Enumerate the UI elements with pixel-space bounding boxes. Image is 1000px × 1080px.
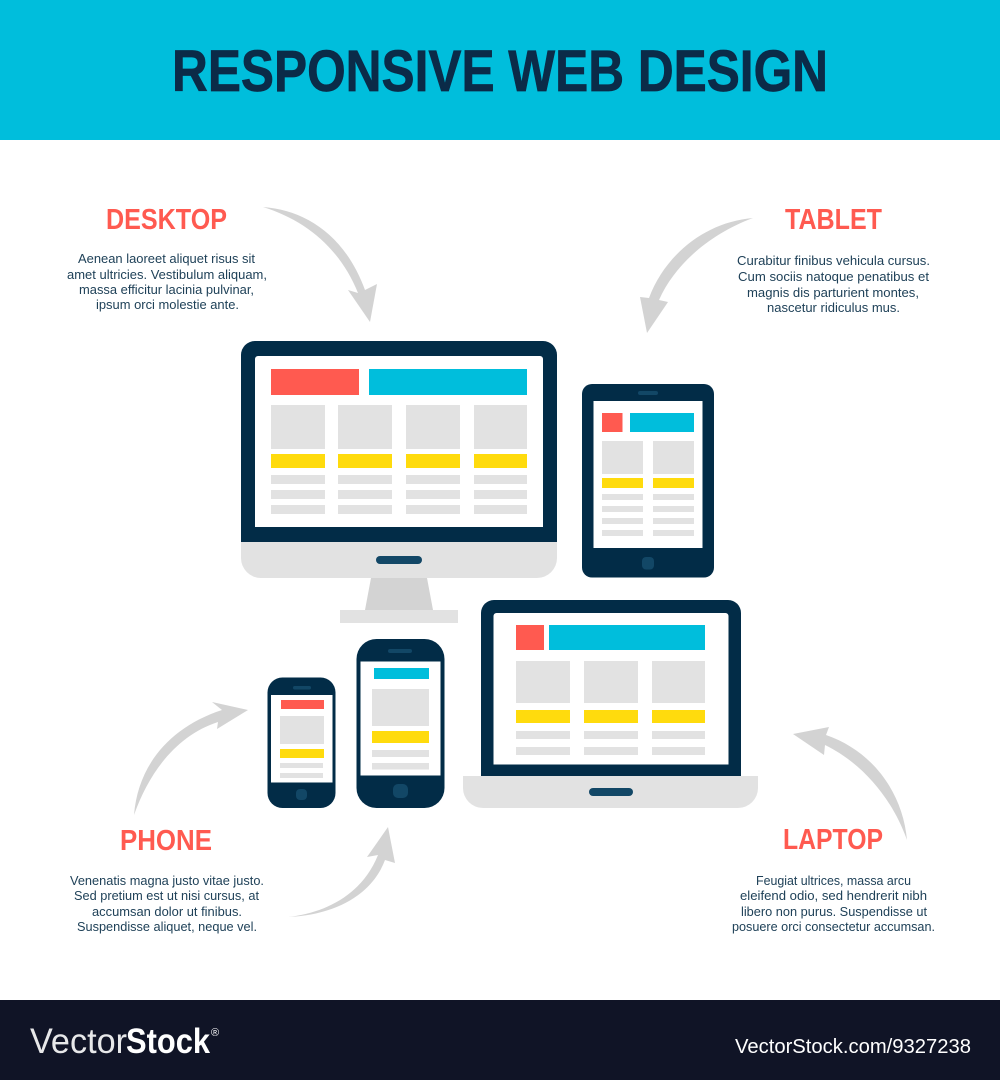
arrow: phone lower <box>288 827 395 917</box>
text block: tablet: Cum sociis natoque penatibus et <box>738 270 930 284</box>
text block: laptop: libero non purus. Suspendisse ut <box>741 905 928 919</box>
tablet screen <box>594 401 702 548</box>
laptop lid <box>481 600 741 776</box>
text block: desktop: massa efficitur lacinia pulvinar, <box>79 283 254 297</box>
panel: desktop description <box>67 204 267 312</box>
small phone screen <box>271 695 332 782</box>
heading: phone: PHONE <box>120 825 212 857</box>
monitor base <box>340 610 458 623</box>
arrow: laptop <box>793 727 907 840</box>
device: large phone <box>356 639 444 808</box>
monitor chin <box>241 542 557 578</box>
device: small phone <box>268 678 336 808</box>
text block: phone: Suspendisse aliquet, neque vel. <box>77 920 257 934</box>
text block: laptop: eleifend odio, sed hendrerit nibh <box>740 889 927 903</box>
text block: laptop <box>732 874 935 934</box>
text block: phone: Venenatis magna justo vitae justo. <box>70 874 264 888</box>
footer logo: ® <box>211 1027 219 1039</box>
monitor frame <box>241 341 557 542</box>
text block: tablet: magnis dis parturient montes, <box>747 286 919 300</box>
arrow: tablet <box>640 218 753 333</box>
footer logo: Vector <box>30 1022 127 1061</box>
heading: tablet: TABLET <box>785 204 882 236</box>
device: laptop <box>463 600 758 808</box>
text block: laptop: Feugiat ultrices, massa arcu <box>756 874 911 888</box>
laptop screen <box>494 613 728 764</box>
monitor stand <box>365 578 433 610</box>
text block: phone: Sed pretium est ut nisi cursus, at <box>74 889 260 903</box>
arrow: phone upper <box>134 702 248 815</box>
text block: tablet: nascetur ridiculus mus. <box>767 301 900 315</box>
device: tablet <box>582 384 714 578</box>
text block: tablet <box>737 254 930 315</box>
text block: desktop: ipsum orci molestie ante. <box>96 298 239 312</box>
text block: desktop: Aenean laoreet aliquet risus sit <box>78 252 256 266</box>
panel: laptop description <box>732 824 935 934</box>
heading: laptop: LAPTOP <box>783 824 883 856</box>
device: desktop monitor <box>241 341 557 623</box>
footer logo <box>30 1022 219 1061</box>
text block: tablet: Curabitur finibus vehicula cursus. <box>737 254 930 268</box>
heading: desktop: DESKTOP <box>106 204 227 236</box>
footer bar <box>0 1000 1000 1080</box>
large phone screen <box>360 662 440 776</box>
text block: desktop <box>67 252 267 312</box>
arrow: desktop <box>263 207 377 322</box>
monitor screen <box>255 356 543 527</box>
text block: phone: accumsan dolor ut finibus. <box>92 905 242 919</box>
panel: tablet description <box>737 204 930 315</box>
title: RESPONSIVE WEB DESIGN <box>172 39 828 104</box>
footer logo: Stock <box>126 1022 210 1061</box>
text block: phone <box>70 874 264 934</box>
text block: desktop: amet ultricies. Vestibulum aliquam, <box>67 268 267 282</box>
footer image id: VectorStock.com/9327238 <box>735 1035 971 1058</box>
monitor slot <box>376 556 422 564</box>
title banner <box>0 0 1000 140</box>
laptop base <box>463 776 758 808</box>
panel: phone description <box>70 825 264 934</box>
text block: laptop: posuere orci consectetur accumsan. <box>732 920 935 934</box>
